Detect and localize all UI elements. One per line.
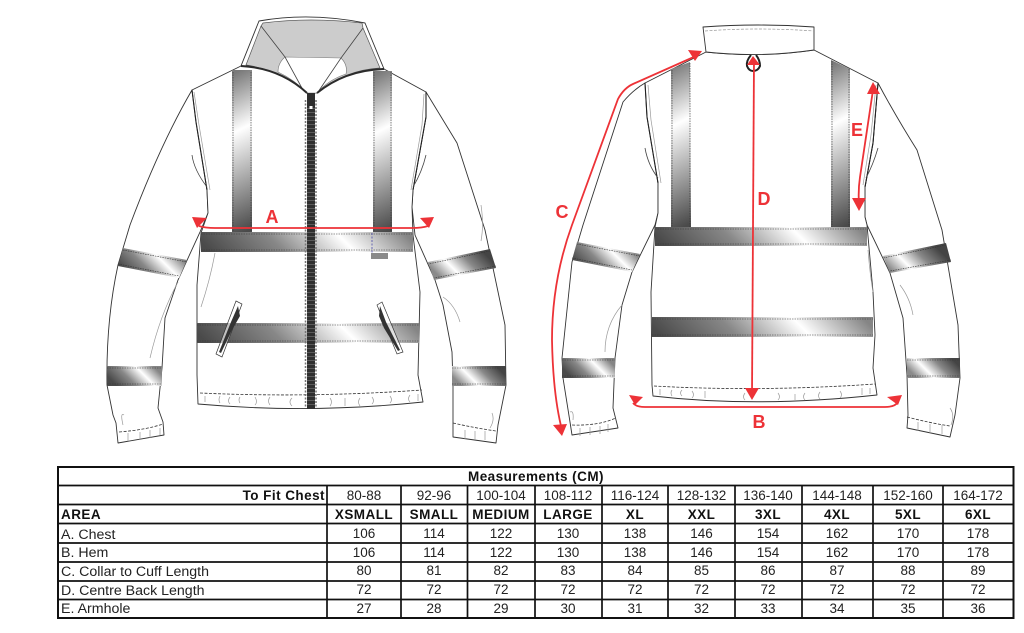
front left sleeve [107,90,208,443]
row: centre back: 72 [694,582,709,597]
row: area and sizes: SMALL [410,507,458,522]
row: centre back: 72 [760,582,776,597]
row: to fit chest: 136-140 [743,488,793,503]
row: armhole: 33 [760,601,776,616]
row: hem: 138 [624,545,646,560]
row: hem: B. Hem [61,545,108,561]
row: armhole: 32 [694,601,709,616]
front lower left sleeve band [107,366,162,386]
row: to fit chest: 164-172 [953,488,1003,503]
row: chest: 138 [624,526,646,541]
back left sleeve [562,83,658,435]
row: to fit chest: 92-96 [417,488,451,503]
label D: D [758,189,770,209]
row: armhole: 27 [356,601,372,616]
label B: B [752,412,766,432]
row: hem [61,545,989,561]
row: area and sizes: 6XL [965,507,991,522]
row: hem: 114 [423,545,445,560]
row: to fit chest [243,488,1003,503]
back shoulder stripes [671,60,850,228]
row: collar to cuff: 84 [627,563,643,578]
front label tag [371,233,388,259]
back right sleeve [865,83,960,437]
row: chest: 170 [897,526,919,541]
row: hem: 106 [353,545,375,560]
front collar [241,17,384,93]
row: armhole: 29 [493,601,509,616]
front pockets [216,301,403,357]
row: centre back: 72 [493,582,509,597]
table title: Measurements (CM) [468,469,604,484]
row: chest: 114 [423,526,445,541]
row: collar to cuff: 89 [970,563,986,578]
back body [645,50,878,402]
row: collar to cuff: 88 [900,563,916,578]
row: area and sizes: AREA [61,507,101,522]
row: hem: 170 [897,545,919,560]
back view jacket [552,25,960,437]
row: hem: 154 [757,545,780,560]
front hem [119,390,496,441]
measurements table [58,467,1014,618]
row: centre back: 72 [829,582,845,597]
row: armhole: 31 [627,601,643,616]
back band stitching [562,229,960,376]
row: centre back: 72 [970,582,986,597]
row: to fit chest: 152-160 [883,488,933,503]
front hem band [197,323,419,343]
front upper left sleeve band [118,248,187,278]
measure E arrow [852,82,880,211]
row: area and sizes: LARGE [543,507,593,522]
row: collar to cuff: C. Collar to Cuff Length [61,564,209,580]
row: chest: 178 [967,526,989,541]
measure C arrow [552,50,702,436]
row: hem: 122 [490,545,512,560]
label A: A [266,207,278,227]
back upper right sleeve band [883,243,951,273]
measure B arrow [629,395,902,407]
row: armhole: 34 [829,601,845,616]
row: to fit chest: 144-148 [812,488,862,503]
back armhole stitching and fold lines [570,83,953,425]
row: to fit chest: 128-132 [677,488,726,503]
row: area and sizes: MEDIUM [472,507,530,522]
row: area and sizes: 3XL [755,507,781,522]
front right sleeve [412,92,506,443]
row: chest: 106 [353,526,375,541]
front body [192,66,426,409]
back upper left sleeve band [572,242,640,272]
row: centre back: 72 [560,582,576,597]
row: centre back: 72 [356,582,372,597]
row: centre back: 72 [426,582,442,597]
row: centre back [61,582,986,599]
row: area and sizes: XSMALL [335,507,393,522]
label E: E [851,120,863,140]
back hem [572,384,950,436]
row: armhole [61,601,986,617]
row: centre back: D. Centre Back Length [61,583,205,599]
front shoulder stripes [232,70,392,233]
row: chest: 122 [490,526,512,541]
row: centre back: 72 [627,582,643,597]
row: chest: 162 [826,526,848,541]
row: area and sizes: 4XL [824,507,850,522]
row: chest: A. Chest [61,527,115,543]
row: hem: 178 [967,545,989,560]
row: area and sizes [61,507,991,522]
row: hem: 146 [690,545,713,560]
measure D arrow [745,56,760,400]
row: collar to cuff: 85 [694,563,709,578]
row: armhole: 35 [900,601,916,616]
row: collar to cuff: 82 [493,563,509,578]
front band stitching [107,234,506,384]
back lower left sleeve band [562,358,615,378]
label C: C [556,202,568,222]
row: to fit chest: 108-112 [544,488,592,503]
row: chest: 130 [557,526,579,541]
row: collar to cuff [61,563,986,580]
row: armhole: E. Armhole [61,601,131,617]
measure A arrow [192,217,434,228]
row: collar to cuff: 80 [356,563,372,578]
row: chest: 146 [690,526,713,541]
row: hem: 130 [557,545,579,560]
row: collar to cuff: 81 [426,563,442,578]
row: area and sizes: XXL [688,507,715,522]
back lower right sleeve band [907,358,960,378]
back hem band [652,317,873,337]
front zipper [306,93,316,409]
front lower right sleeve band [452,366,506,386]
row: to fit chest: 116-124 [611,488,660,503]
row: to fit chest: 100-104 [476,488,526,503]
row: area and sizes: XL [626,507,644,522]
front upper right sleeve band [428,249,496,280]
row: area and sizes: 5XL [895,507,921,522]
row: collar to cuff: 87 [829,563,845,578]
front armhole stitching and fold lines [122,90,493,428]
row: collar to cuff: 83 [560,563,576,578]
back hanger loop [747,55,760,71]
row: chest [61,526,989,543]
row: armhole: 30 [560,601,576,616]
row: armhole: 36 [970,601,986,616]
row: chest: 154 [757,526,780,541]
front view jacket [107,17,506,443]
row: hem: 162 [826,545,848,560]
back collar [703,25,814,55]
front chest band [201,232,413,252]
row: to fit chest: To Fit Chest [243,488,325,503]
row: to fit chest: 80-88 [347,488,381,503]
back chest band [655,227,867,246]
row: collar to cuff: 86 [760,563,776,578]
table grid [58,467,1014,618]
row: centre back: 72 [900,582,916,597]
row: armhole: 28 [426,601,442,616]
